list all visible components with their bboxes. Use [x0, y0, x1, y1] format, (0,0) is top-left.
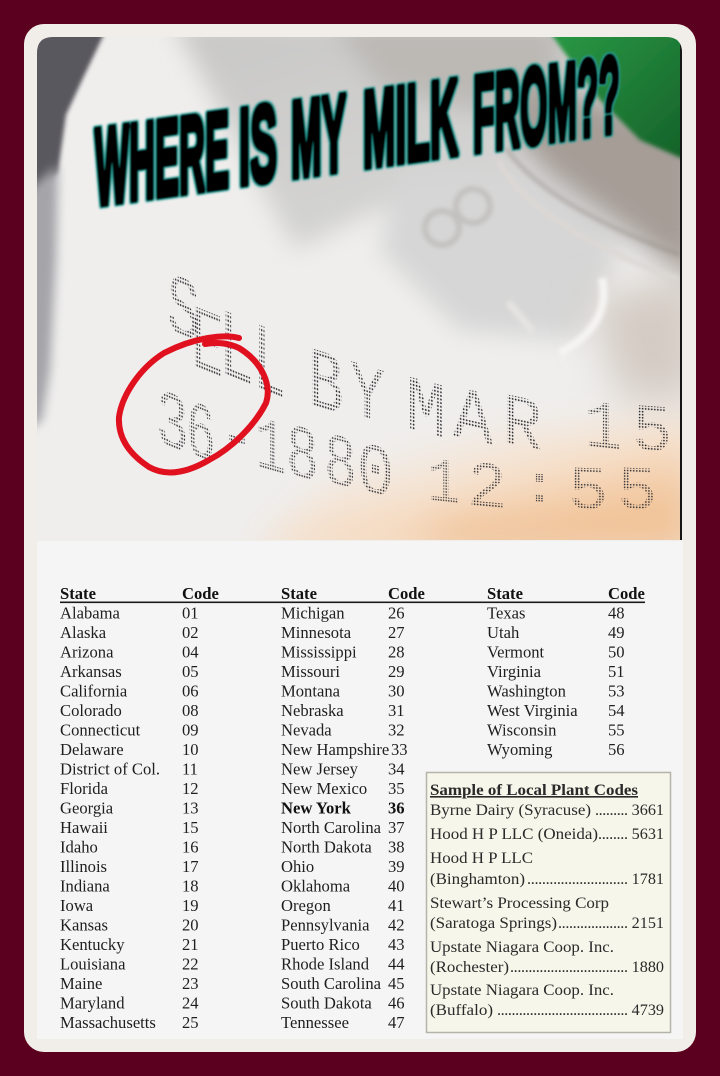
column 1: Colorado: [60, 701, 122, 720]
plant code list: 2151: [632, 914, 664, 932]
column 2: New Hampshire: [281, 740, 389, 759]
title: MY: [291, 72, 346, 200]
column 1: 10: [182, 740, 199, 759]
column 1: Hawaii: [60, 818, 108, 837]
column 1: Maine: [60, 974, 102, 993]
date code first line: R: [502, 382, 542, 473]
date code second line: 3: [156, 375, 189, 479]
plant code list: (Saratoga Springs): [430, 914, 557, 932]
table background: [37, 541, 683, 1039]
column 1: Delaware: [60, 740, 124, 759]
dark upper-left background: [37, 37, 106, 192]
photo right edge: [680, 44, 682, 540]
column 2: State: [281, 584, 317, 603]
column 1: Arizona: [60, 642, 114, 662]
date code second line: 8: [324, 419, 357, 512]
date code second line: 1: [427, 448, 461, 524]
column 1: 09: [182, 720, 199, 740]
column 3: 48: [608, 604, 625, 622]
column 1: Code: [182, 584, 219, 603]
column 2: [281, 584, 425, 1032]
column 3: Virginia: [487, 662, 542, 681]
column 2: Tennessee: [281, 1013, 349, 1032]
column 3: Utah: [487, 623, 520, 642]
column 1: California: [60, 682, 128, 700]
column 1: [60, 584, 219, 1032]
column 2: North Carolina: [281, 818, 382, 837]
plant code list: (Rochester): [430, 958, 509, 976]
date code first line: M: [406, 363, 446, 463]
column 2: 32: [388, 720, 405, 740]
date code second line: 0: [357, 430, 394, 521]
column 1: 04: [182, 642, 199, 662]
panel heading: Sample of Local Plant Codes: [430, 781, 638, 799]
date code first line: L: [253, 306, 286, 429]
plant code list: ................................: [510, 958, 628, 976]
column 1: Georgia: [60, 798, 114, 818]
column 2: Puerto Rico: [281, 935, 360, 954]
column 1: 24: [182, 994, 199, 1012]
date code first line: L: [219, 292, 254, 416]
date code second line: 2: [467, 451, 507, 528]
plant code list: .........: [595, 801, 628, 819]
grey left edge: [37, 164, 64, 430]
column 2: Nebraska: [281, 701, 344, 720]
column 2: 26: [388, 604, 405, 622]
title: WHERE: [95, 88, 229, 228]
column 3: Texas: [487, 604, 525, 622]
column 1: 12: [182, 779, 199, 798]
column 2: South Carolina: [281, 974, 382, 993]
title: MILK: [363, 56, 458, 190]
column 1: 15: [182, 818, 199, 837]
column 2: Rhode Island: [281, 954, 370, 974]
column 2: Pennsylvania: [281, 916, 370, 934]
plant code list: (Binghamton): [430, 870, 525, 888]
column 1: District of Col.: [60, 760, 160, 778]
column 2: Mississippi: [281, 642, 357, 662]
column 1: Alabama: [60, 604, 121, 622]
column 2: 39: [388, 857, 405, 876]
date code second line: 8: [286, 411, 319, 506]
plant code list: Hood H P LLC (Oneida): [430, 825, 598, 843]
date code second line: 5: [617, 457, 657, 529]
plant code list: 3661: [632, 801, 664, 819]
column 2: 40: [388, 876, 405, 896]
column 3: [487, 584, 645, 759]
column 3: Vermont: [487, 642, 545, 662]
column 1: 22: [182, 954, 199, 974]
bottle ring arc: [618, 254, 643, 266]
column 2: Code: [388, 584, 425, 603]
column 1: 21: [182, 935, 199, 954]
plant code list: [430, 801, 664, 1019]
red circle around state code: [119, 336, 268, 472]
column 1: Kansas: [60, 916, 108, 934]
title: [95, 33, 620, 228]
plant code list: 5631: [632, 825, 664, 843]
plant code list: 1880: [632, 958, 664, 976]
column 1: 02: [182, 623, 199, 642]
plant code list: (Buffalo): [430, 1001, 493, 1019]
column 2: 27: [388, 623, 405, 642]
plant code list: Stewart’s Processing Corp: [430, 894, 609, 912]
column 1: 25: [182, 1013, 199, 1032]
column 1: Indiana: [60, 876, 110, 896]
column 2: 41: [388, 896, 405, 915]
column 2: North Dakota: [281, 838, 372, 856]
column 2: 46: [388, 994, 405, 1012]
date code second line: [160, 392, 653, 510]
date code first line: B: [308, 332, 344, 441]
date code first line: E: [191, 290, 224, 407]
column 2: South Dakota: [281, 994, 372, 1012]
column 1: Florida: [60, 779, 109, 798]
column 1: Alaska: [60, 623, 107, 642]
date code second line: 1: [255, 403, 287, 498]
plant code list: 4739: [632, 1001, 664, 1019]
column 1: Louisiana: [60, 954, 126, 974]
panel: sample of local plant codes: [426, 772, 670, 1032]
column 2: Oklahoma: [281, 876, 351, 896]
date code second line: -: [220, 390, 254, 490]
column 3: 55: [608, 720, 625, 740]
column 1: Massachusetts: [60, 1013, 156, 1032]
date code first line: S: [167, 259, 200, 369]
column 1: 05: [182, 662, 199, 681]
plant code list: Upstate Niagara Coop. Inc.: [430, 981, 614, 999]
column 2: Michigan: [281, 604, 345, 622]
column 1: 16: [182, 838, 199, 856]
column 1: 08: [182, 701, 199, 720]
date code first line: 1: [584, 390, 623, 472]
column 3: 53: [608, 682, 625, 700]
column 2: 43: [388, 935, 405, 954]
date code first line: Y: [350, 348, 385, 448]
column 2: 45: [388, 974, 405, 993]
column 2: 35: [388, 779, 405, 798]
column 3: Wyoming: [487, 740, 552, 759]
column 1: Connecticut: [60, 720, 141, 740]
title: IS: [239, 82, 277, 207]
column 3: State: [487, 584, 523, 603]
column 3: West Virginia: [487, 701, 578, 720]
column 2: 30: [388, 682, 405, 700]
state code table: [60, 584, 645, 1032]
column 3: 54: [608, 701, 625, 720]
column 2: 47: [388, 1013, 405, 1032]
date code second line: 6: [186, 385, 216, 489]
column 2: Nevada: [281, 720, 332, 740]
plant code list: ...........................: [527, 870, 628, 888]
column 1: 20: [182, 916, 199, 934]
column 2: 42: [388, 916, 405, 934]
column 2: 31: [388, 701, 405, 720]
column 1: Idaho: [60, 838, 98, 856]
date code second line: :: [521, 458, 558, 519]
plant code list: 1781: [632, 870, 664, 888]
column 2: New Mexico: [281, 779, 367, 798]
column 1: Kentucky: [60, 935, 125, 954]
column 1: Illinois: [60, 857, 107, 876]
column 1: 06: [182, 682, 199, 700]
column 2: 38: [388, 838, 405, 856]
column 2: 37: [388, 818, 405, 837]
column 2: 34: [388, 760, 405, 778]
plant code list: ...................: [558, 914, 628, 932]
column 2: 29: [388, 662, 405, 681]
embossed bracket mark: [560, 278, 604, 353]
column 2: 36: [388, 798, 405, 818]
column 2: Montana: [281, 682, 341, 700]
column 1: State: [60, 584, 96, 603]
date code first line: 5: [632, 394, 672, 473]
plant code list: Hood H P LLC: [430, 849, 533, 867]
column 3: Wisconsin: [487, 720, 557, 740]
column 1: 13: [182, 798, 199, 818]
embossed recycle number: [425, 189, 490, 245]
column 1: 01: [182, 604, 199, 622]
plant code list: ........: [598, 825, 628, 843]
photo: milk jug with printed date code: [37, 37, 682, 540]
column 3: 49: [608, 623, 625, 642]
column 2: 44: [388, 954, 405, 974]
date code second line: 5: [568, 457, 608, 529]
column 1: 11: [182, 760, 198, 778]
column 2: Ohio: [281, 857, 314, 876]
column 2: New Jersey: [281, 760, 359, 778]
date code first line: A: [453, 373, 494, 468]
column 2: Oregon: [281, 896, 331, 915]
column 2: Missouri: [281, 662, 340, 681]
column 1: Maryland: [60, 994, 125, 1012]
plant code list: Upstate Niagara Coop. Inc.: [430, 938, 614, 956]
column 2: 28: [388, 642, 405, 662]
column 2: 33: [391, 740, 408, 759]
column 2: Minnesota: [281, 623, 352, 642]
plant code list: Byrne Dairy (Syracuse): [430, 801, 591, 819]
column 1: 18: [182, 876, 199, 896]
column 2: New York: [281, 798, 352, 818]
column 1: 17: [182, 857, 199, 876]
column 1: 19: [182, 896, 199, 915]
column 3: Code: [608, 584, 645, 603]
column 1: Iowa: [60, 896, 94, 915]
table header rule: [60, 602, 645, 603]
column 1: 23: [182, 974, 199, 993]
column 1: Arkansas: [60, 662, 122, 681]
green cap: [549, 37, 682, 162]
date code first line: [170, 276, 668, 452]
column 3: Washington: [487, 682, 567, 700]
column 3: 56: [608, 740, 625, 759]
plant code list: ....................................: [497, 1001, 628, 1019]
column 3: 51: [608, 662, 625, 681]
column 3: 50: [608, 642, 625, 662]
